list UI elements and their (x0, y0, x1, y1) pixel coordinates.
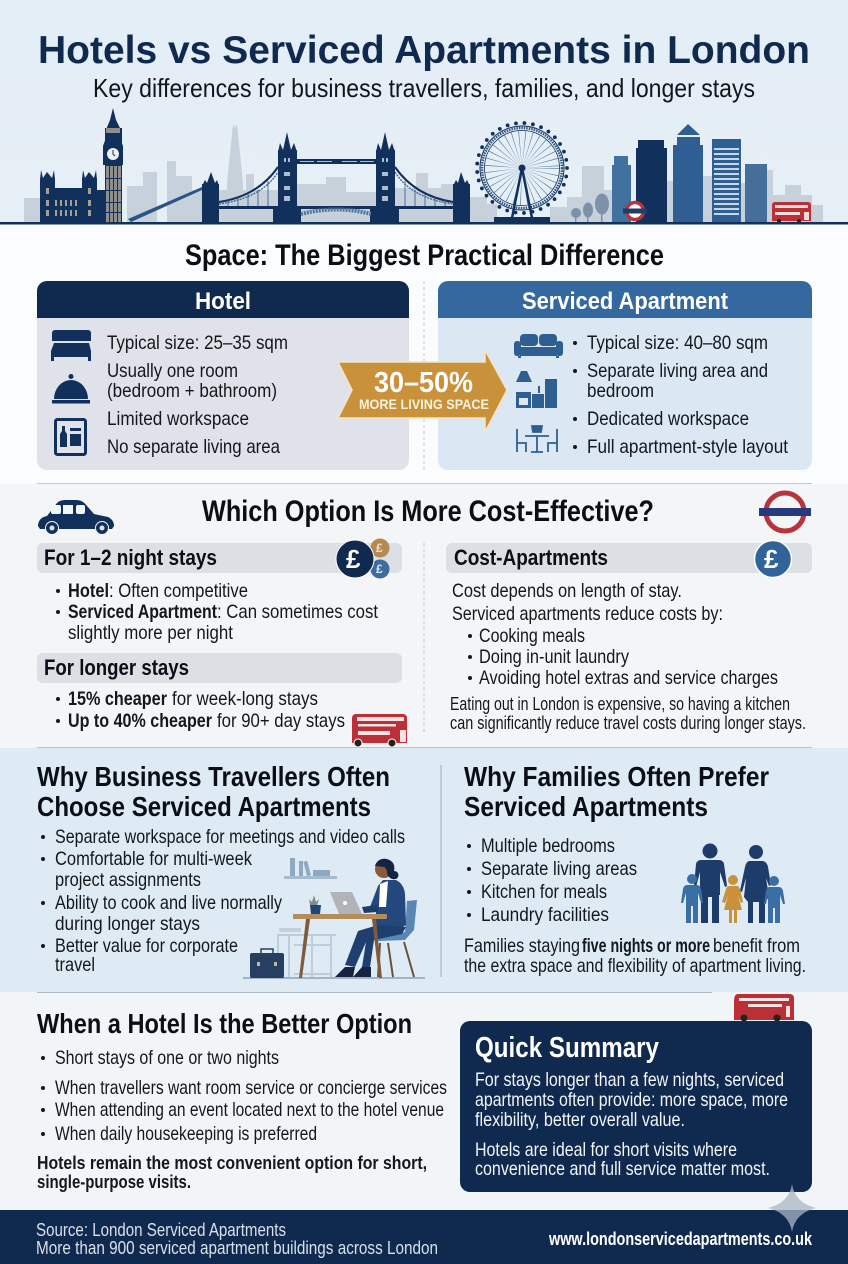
text: business bullets: Ability to cook and live normally (55, 892, 282, 914)
header banner (0, 0, 848, 224)
icon: pound coin (754, 540, 792, 578)
text: family bullets (467, 835, 637, 926)
text: family bullets: Separate living areas (481, 858, 637, 880)
hotel facts text: No separate living area (107, 436, 280, 458)
apartment facts text: Separate living area and (587, 360, 768, 382)
icon: red bus (734, 994, 794, 1022)
footer source text: Source: London Serviced Apartments (36, 1220, 286, 1240)
icon: underground roundel (759, 493, 811, 531)
text: hotel bullets: When attending an event located next to the hotel venue (55, 1099, 444, 1121)
text: business bullets: Comfortable for multi-week (55, 848, 252, 870)
panel: 1-2 night stays: For 1–2 night stays (44, 545, 217, 570)
illustration: woman working at desk (243, 858, 425, 978)
text: hotel conclusion: single-purpose visits. (37, 1172, 191, 1192)
text: summary body: flexibility, better overall value. (475, 1109, 685, 1131)
text: business bullets: project assignments (55, 869, 201, 891)
text: hotel conclusion: Hotels remain the most convenient option for short, (37, 1153, 427, 1173)
text: short stay bullets: : Can sometimes cost (217, 601, 378, 623)
hotel facts text (107, 332, 288, 458)
text: hotel bullets: When travellers want room service or concierge services (55, 1077, 447, 1099)
hotel facts text: Limited workspace (107, 408, 249, 430)
text: short stay bullets: Serviced Apartment (68, 601, 217, 623)
footer (0, 1184, 848, 1264)
apartment panel header: Serviced Apartment (522, 288, 728, 315)
panel: quick summary: Quick Summary (475, 1032, 659, 1064)
text: summary body: For stays longer than a few nights, serviced (475, 1069, 784, 1091)
skyscrapers (612, 124, 767, 223)
icon: red bus (352, 714, 407, 747)
subtitle: Key differences for business travellers, families, and longer stays (93, 73, 755, 103)
text: apartment cost details: Avoiding hotel extras and service charges (479, 667, 778, 689)
underground roundel (623, 202, 647, 220)
text: hotel conclusion (37, 1153, 427, 1192)
text: summary body: apartments often provide: more space, more (475, 1089, 788, 1111)
icon: pound coins: £ (376, 541, 383, 555)
divider (423, 281, 425, 470)
text: hotel bullets: When daily housekeeping is preferred (55, 1123, 317, 1145)
panel: business travellers: Choose Serviced Apartments (37, 791, 371, 822)
panel: business travellers (37, 761, 425, 978)
Parliament and Big Ben (40, 108, 123, 223)
icon: pound coin: £ (764, 544, 779, 574)
panel: when a hotel is better (37, 1008, 447, 1192)
panel: hotel (37, 281, 409, 470)
text: summary body: Hotels are ideal for short visits where (475, 1139, 737, 1161)
text: short stay bullets (56, 580, 378, 644)
decorative sparkle (768, 1184, 816, 1232)
hotel facts text: Usually one room (107, 360, 238, 382)
text: family note: Families staying (464, 935, 580, 957)
icon: family (681, 844, 785, 923)
icon: kitchen (516, 371, 557, 408)
icon: pound coins: £ (346, 544, 361, 574)
section heading: space: Space: The Biggest Practical Difference (185, 239, 664, 272)
text: business bullets: travel (55, 954, 95, 976)
apartment facts text: Dedicated workspace (587, 408, 749, 430)
icon: pound coins (336, 538, 390, 578)
panel: serviced apartment (438, 281, 812, 470)
icon: london taxi (38, 500, 114, 534)
text: apartment cost details: Serviced apartments reduce costs by: (452, 603, 723, 625)
icon: sofa (514, 334, 563, 358)
panel: 1-2 night stays (37, 538, 402, 644)
hotel facts text: (bedroom + bathroom) (107, 380, 277, 402)
icon: service bell (52, 374, 90, 404)
title: Hotels vs Serviced Apartments in London (38, 29, 810, 72)
text: business bullets: Separate workspace for meetings and video calls (55, 826, 405, 848)
icon: dining table (517, 426, 557, 452)
text: hotel bullets (41, 1047, 447, 1145)
text: summary body (475, 1069, 788, 1180)
panel: when a hotel is better: When a Hotel Is the Better Option (37, 1008, 412, 1039)
trees (571, 194, 609, 223)
hotel facts text: Typical size: 25–35 sqm (107, 332, 288, 354)
footer source text: More than 900 serviced apartment buildings across London (36, 1238, 438, 1258)
panel: cost apartments (446, 540, 812, 733)
hotel panel header (37, 281, 409, 318)
text: short stay bullets: slightly more per night (68, 622, 233, 644)
arrow: 30-50% more living space: 30–50% (374, 367, 473, 399)
hotel panel header: Hotel (195, 288, 251, 315)
panel: quick summary (460, 1021, 812, 1192)
text: family note (464, 935, 806, 977)
panel: families: Why Families Often Prefer (464, 761, 769, 792)
panel: families: Serviced Apartments (464, 791, 708, 822)
panel: longer stays: For longer stays (44, 655, 189, 680)
icon: bed (51, 330, 91, 361)
apartment facts text: Typical size: 40–80 sqm (587, 332, 768, 354)
panel: business travellers: Why Business Travellers Often (37, 761, 390, 792)
section heading: cost: Which Option Is More Cost-Effective? (202, 495, 654, 528)
icon: minibar (56, 420, 86, 454)
panel: cost apartments: Cost-Apartments (454, 545, 608, 570)
text: apartment cost details: Cost depends on length of stay. (452, 580, 682, 602)
footer source text (36, 1220, 438, 1258)
text: family bullets: Laundry facilities (481, 904, 609, 926)
text: apartment cost details (450, 580, 806, 733)
text: business bullets: during longer stays (55, 913, 200, 935)
text: longer stay bullets (56, 688, 345, 732)
text: family bullets: Kitchen for meals (481, 881, 607, 903)
text: apartment cost details: Cooking meals (479, 625, 585, 647)
text: family note: five nights or more (582, 935, 710, 957)
icon: pound coins: £ (376, 562, 383, 576)
panel: longer stays (37, 653, 402, 732)
text: family note: benefit from (713, 935, 800, 957)
apartment facts text: bedroom (587, 380, 654, 402)
text: longer stay bullets: for 90+ day stays (217, 710, 345, 732)
text: longer stay bullets: 15% cheaper (68, 688, 167, 710)
text: hotel bullets: Short stays of one or two nights (55, 1047, 279, 1069)
text: business bullets: Better value for corporate (55, 935, 238, 957)
London skyline illustration (0, 108, 848, 224)
apartment panel header (438, 281, 812, 318)
text: apartment cost details: Doing in-unit laundry (479, 646, 629, 668)
panel: families (464, 761, 806, 977)
text: short stay bullets: : Often competitive (109, 580, 248, 602)
arrow: 30-50% more living space (338, 350, 507, 432)
text: longer stay bullets: Up to 40% cheaper (68, 710, 212, 732)
apartment facts text (573, 332, 789, 458)
London Eye (477, 123, 567, 223)
Tower Bridge (219, 167, 453, 206)
text: business bullets (41, 826, 405, 976)
text: family bullets: Multiple bedrooms (481, 835, 615, 857)
text: longer stay bullets: for week-long stays (172, 688, 318, 710)
red bus (772, 202, 811, 223)
text: summary body: convenience and full service matter most. (475, 1158, 770, 1180)
text: short stay bullets: Hotel (68, 580, 109, 602)
apartment facts text: Full apartment-style layout (587, 436, 789, 458)
arrow: 30-50% more living space: MORE LIVING SPACE (359, 396, 489, 412)
